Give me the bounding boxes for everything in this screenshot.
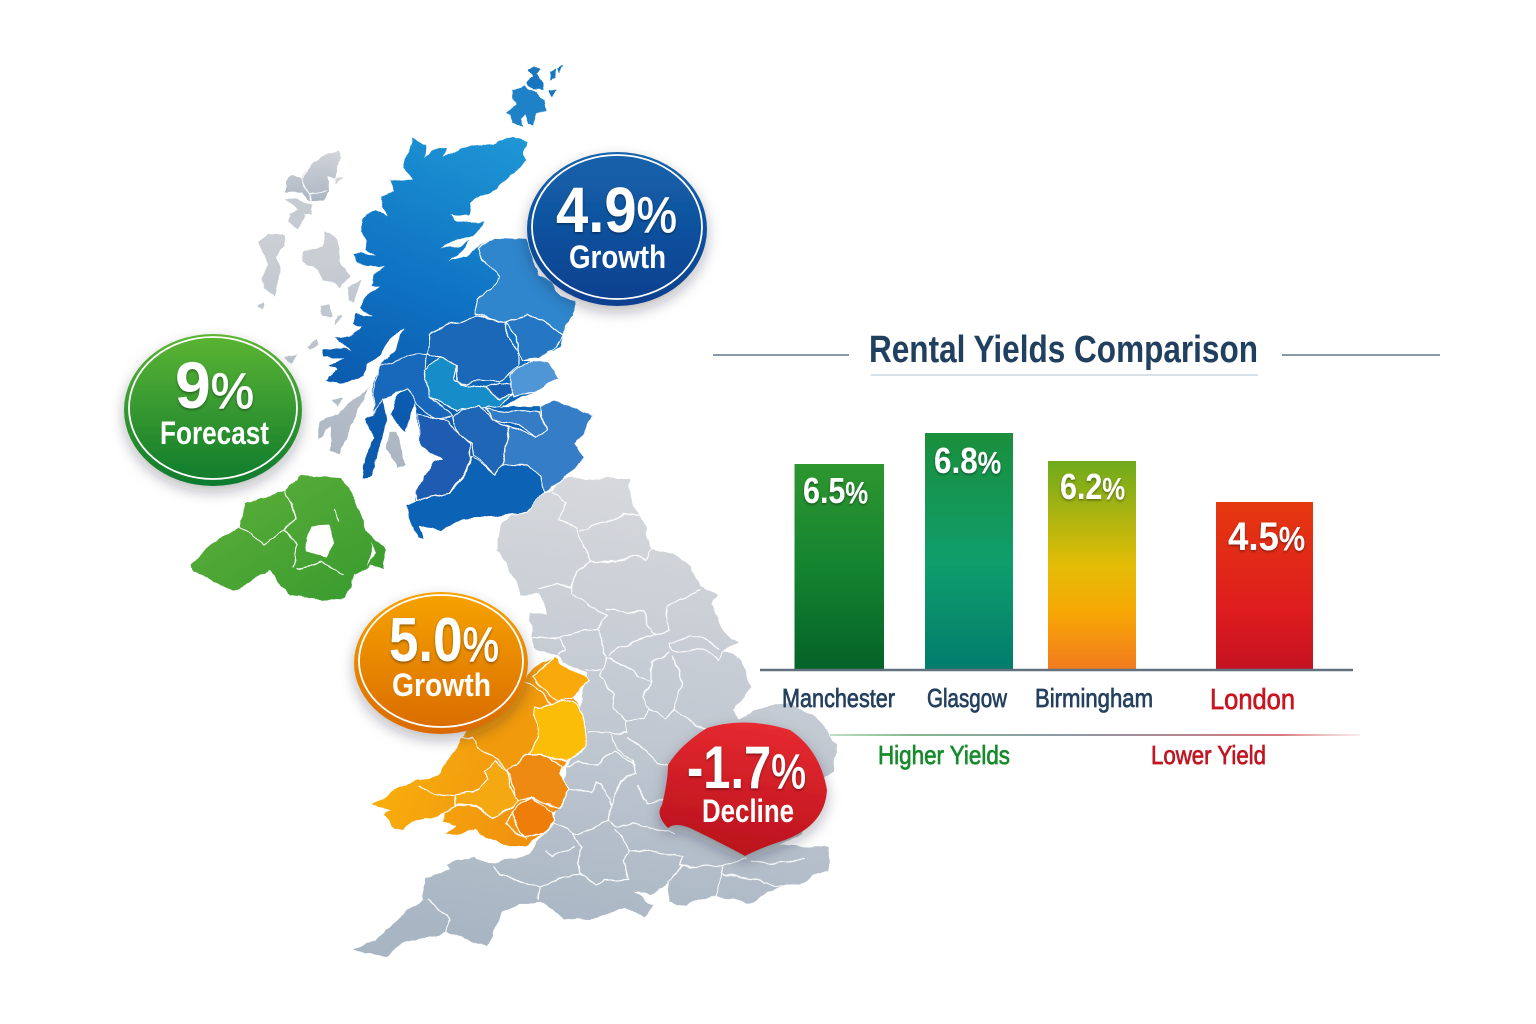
axis label: Birmingham: Birmingham <box>1035 683 1153 713</box>
map: Scotland <box>325 137 592 540</box>
callout: London -1.7% Decline: -1.7% <box>687 734 806 801</box>
Lough Neagh <box>306 525 334 556</box>
legend: higher and lower yields <box>830 734 1360 770</box>
UK map <box>193 65 837 957</box>
callout: London -1.7% Decline: Decline <box>702 793 794 829</box>
axis label: Manchester: Manchester <box>782 683 895 713</box>
bar: Manchester 6.5% <box>794 464 884 670</box>
map: Orkney and Shetland <box>508 65 565 127</box>
bar: Glasgow 6.8% <box>925 433 1013 670</box>
callout: Scotland 4.9% Growth: 4.9% <box>556 174 677 246</box>
bar: Glasgow 6.8%: 6.8% <box>934 440 1001 481</box>
axis label: Glasgow: Glasgow <box>927 683 1007 713</box>
map: England <box>353 480 837 957</box>
callout: Scotland 4.9% Growth <box>527 152 707 306</box>
bar: Manchester 6.5%: 6.5% <box>803 470 868 511</box>
heading: Rental Yields Comparison: Rental Yields Comparison <box>869 329 1258 371</box>
callout: Northern Ireland 9% Forecast: Forecast <box>160 415 269 451</box>
callout: Scotland 4.9% Growth: Growth <box>569 239 666 275</box>
axis label: London: London <box>1210 684 1295 716</box>
callout: Northern Ireland 9% Forecast: 9% <box>175 348 254 422</box>
callout: Wales 5.0% Growth: 5.0% <box>389 606 499 675</box>
callout: Northern Ireland 9% Forecast <box>124 334 302 486</box>
bar: Birmingham 6.2% <box>1048 461 1136 670</box>
callout: London -1.7% Decline <box>660 722 827 856</box>
callout: Wales 5.0% Growth: Growth <box>392 667 491 703</box>
map: Wales <box>373 658 588 847</box>
bar: London 4.5%: 4.5% <box>1228 515 1305 559</box>
bar: London 4.5% <box>1216 502 1313 670</box>
bar: Birmingham 6.2%: 6.2% <box>1060 466 1125 507</box>
map: Scottish western isles <box>257 149 407 468</box>
bar chart: rental yields <box>760 433 1353 716</box>
callout: Wales 5.0% Growth <box>354 592 528 734</box>
map: Northern Ireland <box>193 475 385 600</box>
legend: higher and lower yields: Lower Yield <box>1151 740 1266 770</box>
legend: higher and lower yields: Higher Yields <box>878 740 1010 770</box>
